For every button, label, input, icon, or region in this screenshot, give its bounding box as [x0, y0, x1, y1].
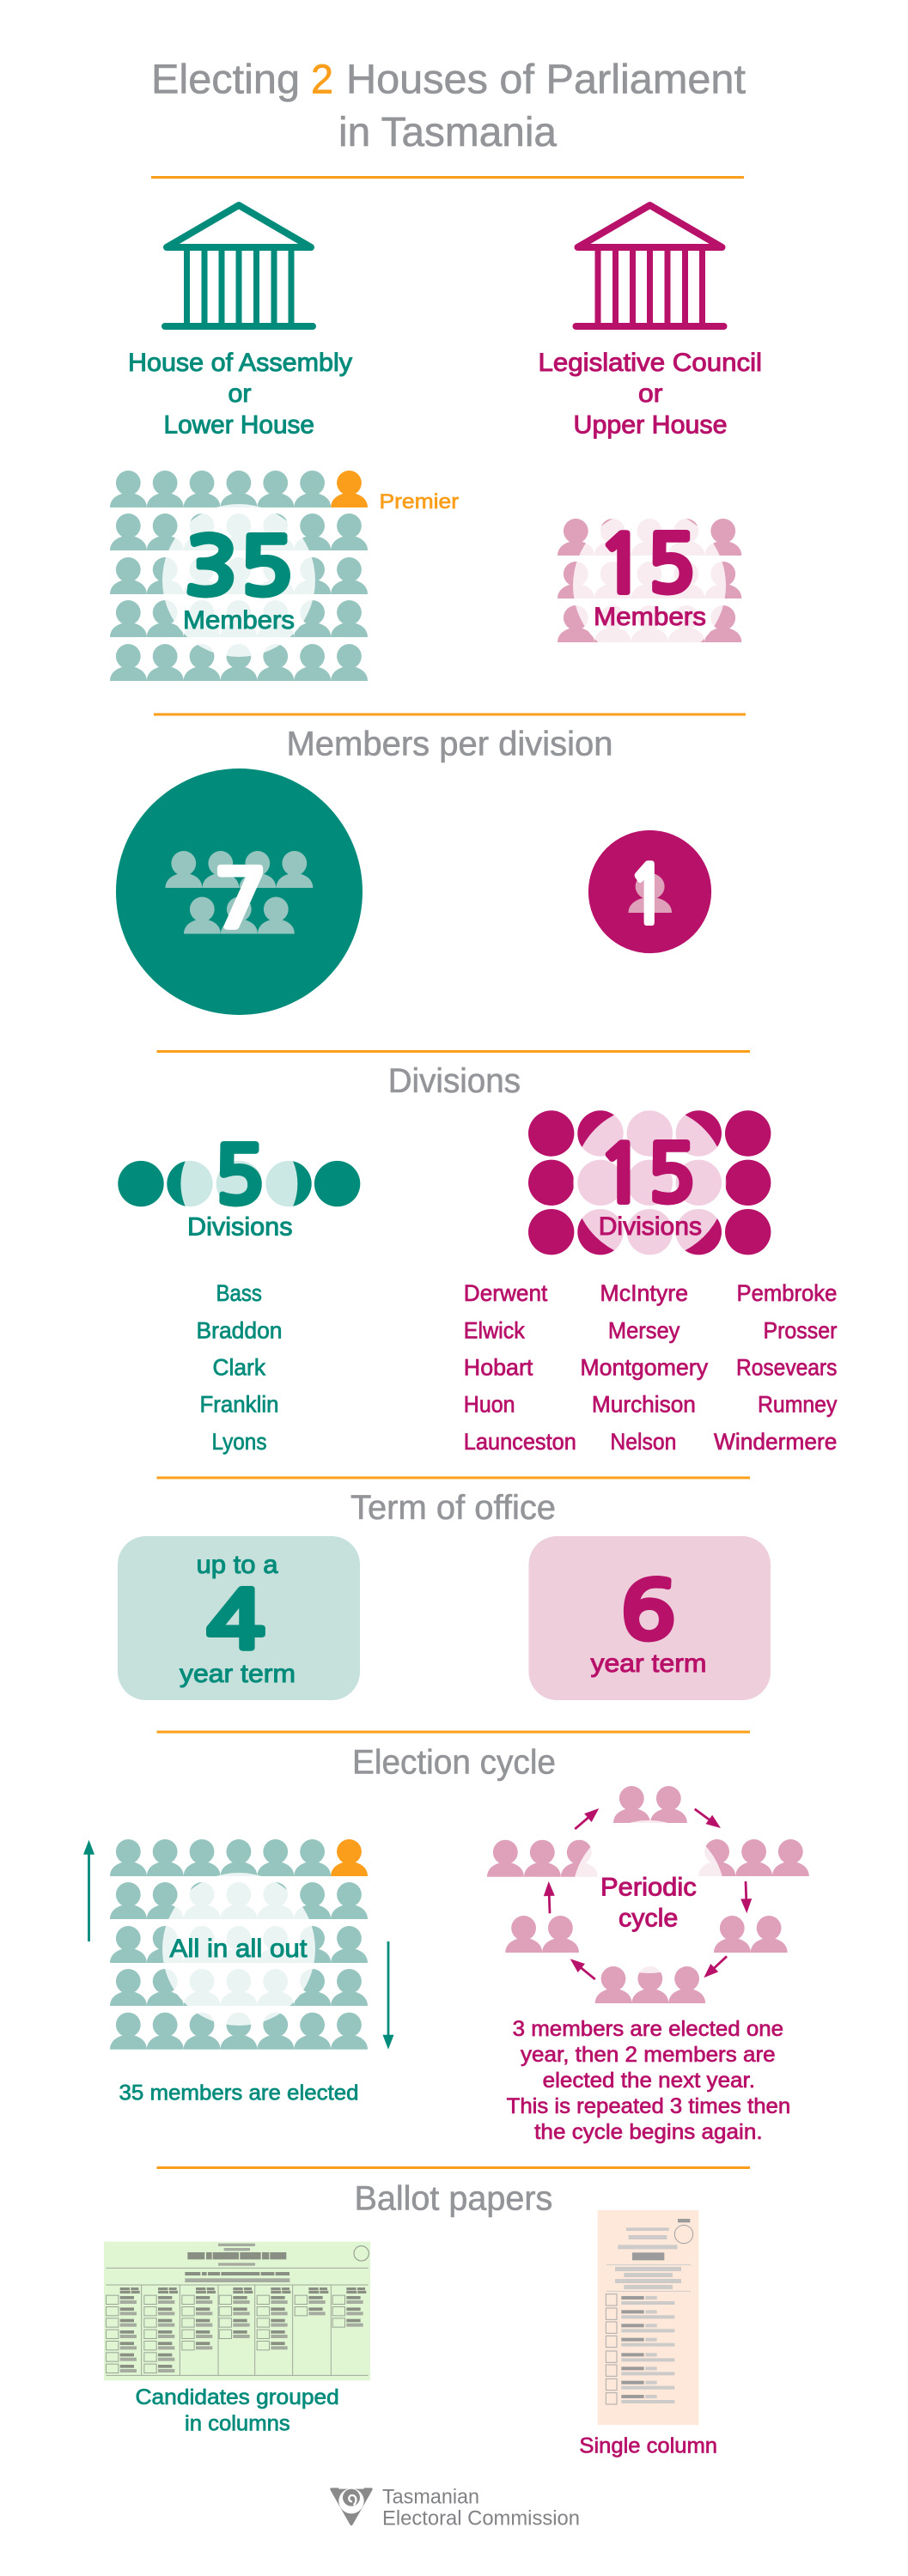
list: Legislative Council divisions: Prosser — [763, 1317, 837, 1343]
title: Houses of Parliament — [346, 57, 746, 103]
caption: Single column: Single column — [579, 2434, 717, 2458]
heading: Legislative Council or Upper House — [538, 349, 762, 440]
people grid: 35 members: 35 — [184, 528, 294, 607]
caption: periodic cycle explanation: elected the next year. — [543, 2069, 755, 2093]
heading: Legislative Council or Upper House: or — [638, 380, 662, 408]
title: in Tasmania — [338, 110, 557, 155]
circle: 7 members per division — [116, 769, 363, 1015]
graphic: 5 divisions — [118, 1126, 360, 1242]
card: 6 year term: year term — [591, 1649, 706, 1678]
logo: Tasmanian Electoral Commission — [330, 2486, 580, 2530]
list: Legislative Council divisions: McIntyre — [600, 1280, 688, 1306]
wordmark: Electoral Commission — [382, 2507, 580, 2530]
panel: House of Assembly — [110, 205, 459, 681]
people grid: 35 members — [110, 471, 368, 681]
arrow: up — [83, 1840, 94, 1941]
list: House of Assembly divisions — [196, 1280, 282, 1455]
caption: Candidates grouped in columns — [136, 2385, 339, 2436]
title: 2 — [311, 57, 333, 103]
heading: Term of office: Term of office — [350, 1489, 556, 1527]
caption: Candidates grouped in columns: Candidates grouped — [136, 2385, 339, 2409]
icon: magenta parliament building — [576, 205, 723, 326]
list: Legislative Council divisions: Huon — [464, 1392, 515, 1418]
ballot paper: Legislative Council, single column — [598, 2210, 698, 2425]
caption: periodic cycle explanation: the cycle begins again. — [534, 2120, 763, 2144]
graphic: 15 divisions: Divisions — [599, 1212, 702, 1241]
card: 6 year term: 6 — [620, 1572, 676, 1651]
people grid: all in all out — [110, 1839, 368, 2050]
list: Legislative Council divisions: Rumney — [758, 1392, 838, 1418]
caption: periodic cycle explanation: year, then 2 members are — [521, 2043, 776, 2067]
wordmark: Tasmanian — [382, 2486, 479, 2509]
list: House of Assembly divisions: Bass — [216, 1280, 262, 1306]
list: House of Assembly divisions: Franklin — [199, 1392, 278, 1418]
title — [151, 57, 746, 155]
heading: House of Assembly or Lower House: House of Assembly — [128, 349, 352, 377]
circle: 7 members per division: 7 — [214, 860, 267, 939]
list: Legislative Council divisions: Windermere — [714, 1429, 837, 1455]
ballot paper: House of Assembly, grouped columns — [104, 2242, 370, 2380]
heading: House of Assembly or Lower House — [128, 349, 352, 440]
list: Legislative Council divisions: Rosevears — [736, 1355, 837, 1381]
heading: Legislative Council or Upper House: Upper House — [574, 410, 727, 440]
people grid: all in all out: All in all out — [170, 1935, 308, 1963]
list: Legislative Council divisions: Pembroke — [737, 1280, 837, 1306]
title: Electing — [151, 57, 300, 103]
card: up to a 4 year term: up to a — [196, 1551, 278, 1579]
heading: Ballot papers: Ballot papers — [354, 2179, 552, 2217]
heading: Legislative Council or Upper House: Legislative Council — [538, 349, 762, 377]
list: House of Assembly divisions: Clark — [213, 1355, 265, 1381]
list: House of Assembly divisions: Braddon — [196, 1317, 282, 1343]
people grid: 15 members — [558, 509, 741, 662]
list: Legislative Council divisions — [464, 1280, 838, 1455]
list: Legislative Council divisions: Derwent — [464, 1280, 548, 1306]
people ring — [487, 1786, 809, 2003]
heading: Divisions: Divisions — [388, 1062, 521, 1100]
card: up to a 4 year term — [118, 1536, 360, 1700]
label: Periodic cycle — [600, 1874, 697, 1932]
wordmark — [382, 2486, 580, 2530]
panel: Periodic cycle — [487, 1786, 809, 2144]
arrow: down — [383, 1941, 393, 2050]
list: Legislative Council divisions: Hobart — [464, 1355, 533, 1381]
people grid: 15 members: Members — [594, 603, 706, 631]
list: Legislative Council divisions: Nelson — [610, 1429, 676, 1455]
caption: 35 members are elected: 35 members are elected — [119, 2081, 359, 2105]
panel: All in all out — [83, 1839, 393, 2105]
card: up to a 4 year term: 4 — [206, 1582, 265, 1661]
label: Premier: Premier — [380, 490, 459, 513]
list: Legislative Council divisions: Elwick — [464, 1317, 525, 1343]
graphic: 15 divisions: 15 — [597, 1135, 696, 1214]
circle: 1 member per division — [588, 830, 711, 953]
caption: periodic cycle explanation — [507, 2017, 790, 2144]
label: Periodic cycle: Periodic — [600, 1874, 697, 1902]
icon: teal parliament building — [165, 205, 313, 326]
heading: House of Assembly or Lower House: or — [229, 380, 251, 408]
list: Legislative Council divisions: Mersey — [608, 1317, 680, 1343]
panel: Legislative Council — [538, 205, 762, 662]
list: House of Assembly divisions: Lyons — [211, 1429, 266, 1455]
caption: Candidates grouped in columns: in columns — [185, 2412, 290, 2436]
graphic: 5 divisions: 5 — [213, 1137, 265, 1216]
people grid: 15 members: 15 — [597, 526, 696, 605]
list: Legislative Council divisions: Murchison — [592, 1392, 696, 1418]
list: Legislative Council divisions: Montgomery — [580, 1355, 709, 1381]
card: 6 year term — [529, 1536, 771, 1700]
people grid: 35 members: Members — [183, 606, 295, 635]
card: up to a 4 year term: year term — [180, 1660, 296, 1688]
list: Legislative Council divisions: Launceston — [464, 1429, 576, 1455]
arrows: cycle direction — [543, 1804, 753, 1984]
circle: 1 member per division: 1 — [628, 856, 667, 935]
icon: logo mark — [330, 2486, 373, 2525]
label: Periodic cycle: cycle — [619, 1904, 678, 1932]
graphic: 15 divisions — [528, 1106, 771, 1259]
graphic: 5 divisions: Divisions — [187, 1212, 292, 1242]
caption: periodic cycle explanation: 3 members are elected one — [513, 2017, 783, 2041]
heading: Members per division: Members per division — [287, 725, 613, 762]
heading: Election cycle: Election cycle — [352, 1743, 556, 1781]
caption: periodic cycle explanation: This is repeated 3 times then — [507, 2094, 790, 2118]
heading: House of Assembly or Lower House: Lower House — [163, 410, 314, 440]
